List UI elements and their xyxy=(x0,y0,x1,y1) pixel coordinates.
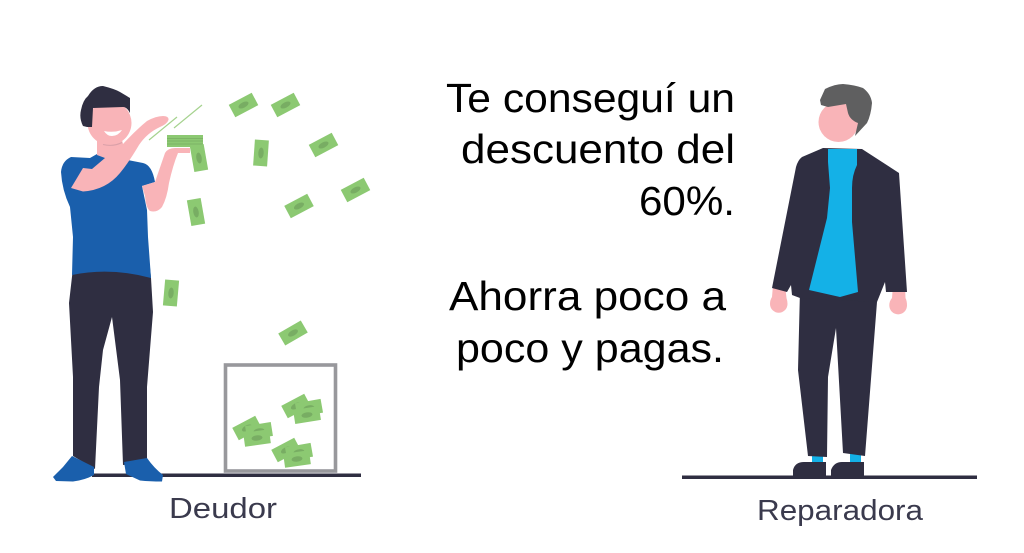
debtor head xyxy=(88,101,132,145)
debtor shoes xyxy=(53,456,163,482)
main text: payment advice xyxy=(449,273,726,371)
left ground line xyxy=(92,474,361,477)
bill xyxy=(278,320,308,346)
right ground line xyxy=(682,476,977,479)
motion lines xyxy=(149,105,202,140)
debtor hair xyxy=(80,86,130,127)
repairer socks xyxy=(812,452,861,464)
main text: discount: Te conseguí un xyxy=(446,75,735,121)
repairer shoes xyxy=(793,462,864,476)
repairer jacket xyxy=(772,148,907,302)
main text: payment advice: poco y pagas. xyxy=(456,325,724,371)
bill xyxy=(309,133,338,157)
bill xyxy=(190,144,208,172)
debtor trousers xyxy=(69,268,153,469)
repairer right hand xyxy=(889,285,907,314)
main text: discount: descuento del xyxy=(461,126,735,172)
repairer hair xyxy=(820,84,872,136)
debtor neck and raised arm xyxy=(71,116,169,192)
debtor shirt xyxy=(61,154,155,278)
main text: payment advice: Ahorra poco a xyxy=(449,273,726,319)
glass box with money xyxy=(226,365,336,471)
bill xyxy=(229,93,258,117)
main text: discount: 60%. xyxy=(639,178,735,224)
bill xyxy=(163,279,179,307)
label: Deudor: Deudor xyxy=(169,493,277,525)
repairer trousers xyxy=(798,290,877,457)
illustration: debtor xyxy=(53,86,203,482)
bill xyxy=(253,140,269,166)
main text: discount xyxy=(446,75,735,224)
money pile 2 xyxy=(281,394,323,424)
bill xyxy=(271,93,300,117)
money pile 1 xyxy=(232,416,273,447)
repairer left hand xyxy=(770,285,788,313)
debtor collar shadow xyxy=(103,142,122,145)
repairer head xyxy=(818,102,858,142)
repairer shirt xyxy=(809,149,858,297)
bill xyxy=(341,178,370,202)
falling bills xyxy=(163,93,370,346)
bill xyxy=(187,198,205,226)
box frame xyxy=(226,365,336,471)
debtor lowered arm xyxy=(142,148,190,212)
bill xyxy=(284,194,314,218)
illustration: repairer xyxy=(770,84,907,476)
money stack in hand xyxy=(167,135,203,147)
money pile 3 xyxy=(271,438,313,468)
debtor smile xyxy=(104,130,122,136)
label: Reparadora: Reparadora xyxy=(757,495,924,527)
